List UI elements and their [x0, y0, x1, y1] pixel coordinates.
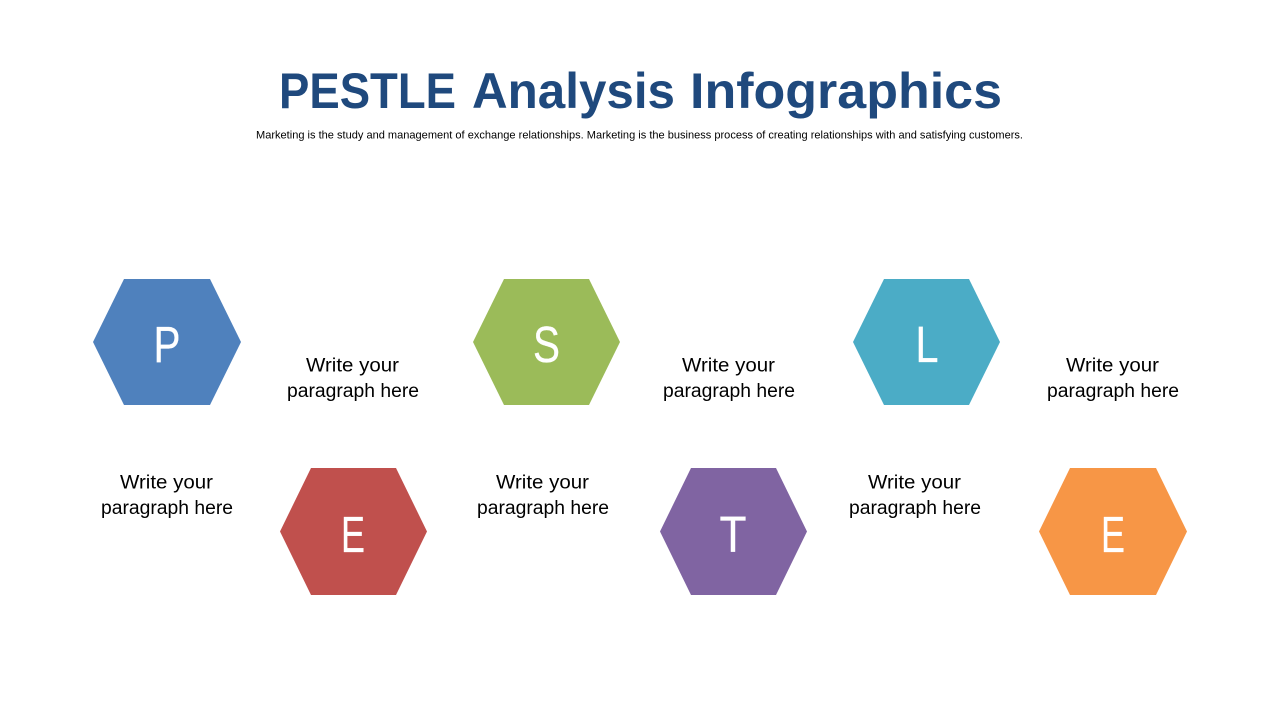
text block: top 3	[1047, 356, 1179, 402]
title: Infographics	[690, 63, 1002, 119]
title	[279, 63, 1002, 119]
hexagon: E (environmental)	[1039, 468, 1187, 595]
text block: top 1: Write your	[306, 356, 400, 376]
hexagon: T	[660, 468, 807, 595]
hexagon: S: S	[533, 316, 560, 373]
text block: top 2	[663, 356, 795, 402]
text block: bottom 1: paragraph here	[101, 498, 233, 519]
text block: bottom 1	[101, 472, 233, 519]
hexagon: T: T	[720, 506, 746, 563]
text block: top 3: Write your	[1066, 356, 1160, 376]
text block: bottom 3: paragraph here	[849, 498, 981, 519]
text block: top 2: paragraph here	[663, 381, 795, 402]
text block: bottom 3: Write your	[868, 472, 962, 494]
hexagon: P: P	[154, 316, 180, 373]
text block: top 1	[287, 356, 419, 402]
text block: bottom 1: Write your	[120, 472, 214, 494]
subtitle: Marketing is the study and management of exchange relationships. Marketing is the business process of creating relationships with and satisfying customers.	[256, 130, 1023, 142]
title: Analysis	[472, 63, 675, 119]
text block: top 1: paragraph here	[287, 381, 419, 402]
text block: bottom 3	[849, 472, 981, 519]
hexagon: L	[853, 279, 1000, 405]
hexagon: E (environmental): E	[1101, 506, 1125, 563]
text block: bottom 2: Write your	[496, 472, 590, 494]
title: PESTLE	[279, 63, 456, 119]
hexagon: E (economic)	[280, 468, 427, 595]
text block: top 3: paragraph here	[1047, 381, 1179, 402]
text block: top 2: Write your	[682, 356, 776, 376]
hexagon: P	[93, 279, 241, 405]
hexagon: E (economic): E	[341, 506, 365, 563]
text block: bottom 2: paragraph here	[477, 498, 609, 519]
hexagon: L: L	[916, 316, 938, 373]
text block: bottom 2	[477, 472, 609, 519]
hexagon: S	[473, 279, 620, 405]
